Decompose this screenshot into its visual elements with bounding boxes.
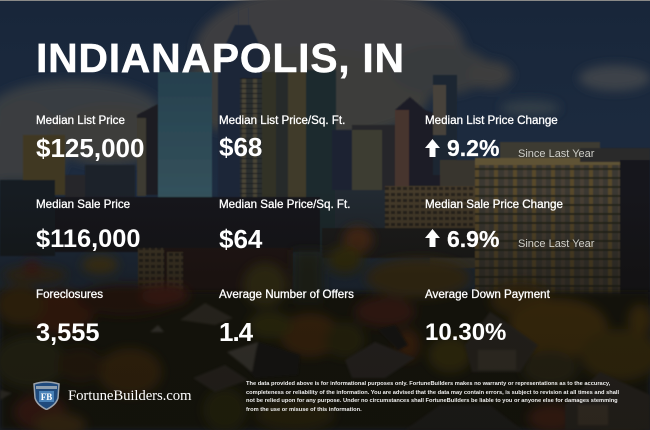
- stat: average down payment: 10.30%: [425, 319, 506, 346]
- stat: median sale price per sq ft: Median Sale Price/Sq. Ft.: [219, 198, 350, 211]
- clouds: [0, 0, 650, 200]
- stat: median sale price: [36, 198, 141, 253]
- wordmark: FortuneBuilders.com: [68, 388, 191, 404]
- stat: median sale price change: 6.9%: [447, 226, 499, 252]
- icon: shield: [33, 381, 60, 410]
- stat: foreclosures: 3,555: [36, 319, 100, 347]
- stat: median sale price change: Median Sale Price Change: [425, 198, 563, 211]
- stat: median sale price: Median Sale Price: [36, 198, 130, 211]
- stat: average number of offers: Average Number of Offers: [219, 288, 354, 301]
- towers: [0, 8, 650, 305]
- stat: median list price per sq ft: Median List Price/Sq. Ft.: [219, 114, 345, 127]
- stat: median sale price change: Since Last Year: [518, 238, 594, 250]
- disclaimer text: from the use or misuse of this information.: [246, 407, 362, 413]
- logo: FortuneBuilders: [33, 381, 192, 410]
- stat: median list price: Median List Price: [36, 114, 125, 127]
- disclaimer text: The data provided above is for informational purposes only. FortuneBuilders makes no warranty or representations as to the accuracy,: [246, 381, 610, 387]
- stat: median list price: $125,000: [36, 133, 144, 163]
- title: INDIANAPOLIS, IN: [36, 35, 405, 81]
- disclaimer text: completeness or reliability of the information. You are advised that the data may contain errors, is subject to revision at all times and shall: [246, 390, 619, 396]
- stat: average down payment: Average Down Payment: [425, 288, 550, 301]
- stat: median list price per sq ft: [219, 114, 345, 162]
- icon: up arrow: [425, 229, 440, 247]
- stat: median list price change: [425, 114, 594, 161]
- house roofs: [0, 303, 650, 430]
- stat: average down payment: [424, 288, 550, 346]
- icon: up arrow: [425, 139, 440, 157]
- stat: median list price per sq ft: $68: [219, 132, 262, 162]
- stat: median list price change: 9.2%: [447, 135, 499, 161]
- icon: shield: FB: [41, 392, 52, 402]
- stat: median sale price per sq ft: [219, 198, 350, 254]
- ground foliage: [0, 292, 650, 430]
- stat: average number of offers: [218, 288, 354, 347]
- stat: foreclosures: [36, 288, 103, 347]
- stat: median sale price: $116,000: [36, 225, 141, 253]
- stat: median list price: [36, 114, 144, 163]
- disclaimer text: not be relied upon for any purpose. Under no circumstances shall FortuneBuilders be liable to you or anyone else for damages stemming: [246, 398, 618, 404]
- stat: median sale price per sq ft: $64: [219, 224, 262, 254]
- stat: average number of offers: 1.4: [219, 317, 252, 347]
- stat: median list price change: Since Last Year: [518, 148, 594, 160]
- stat: foreclosures: Foreclosures: [36, 288, 103, 301]
- stat: median sale price change: [425, 198, 594, 252]
- disclaimer text: [246, 381, 619, 413]
- stat: median list price change: Median List Price Change: [425, 114, 558, 127]
